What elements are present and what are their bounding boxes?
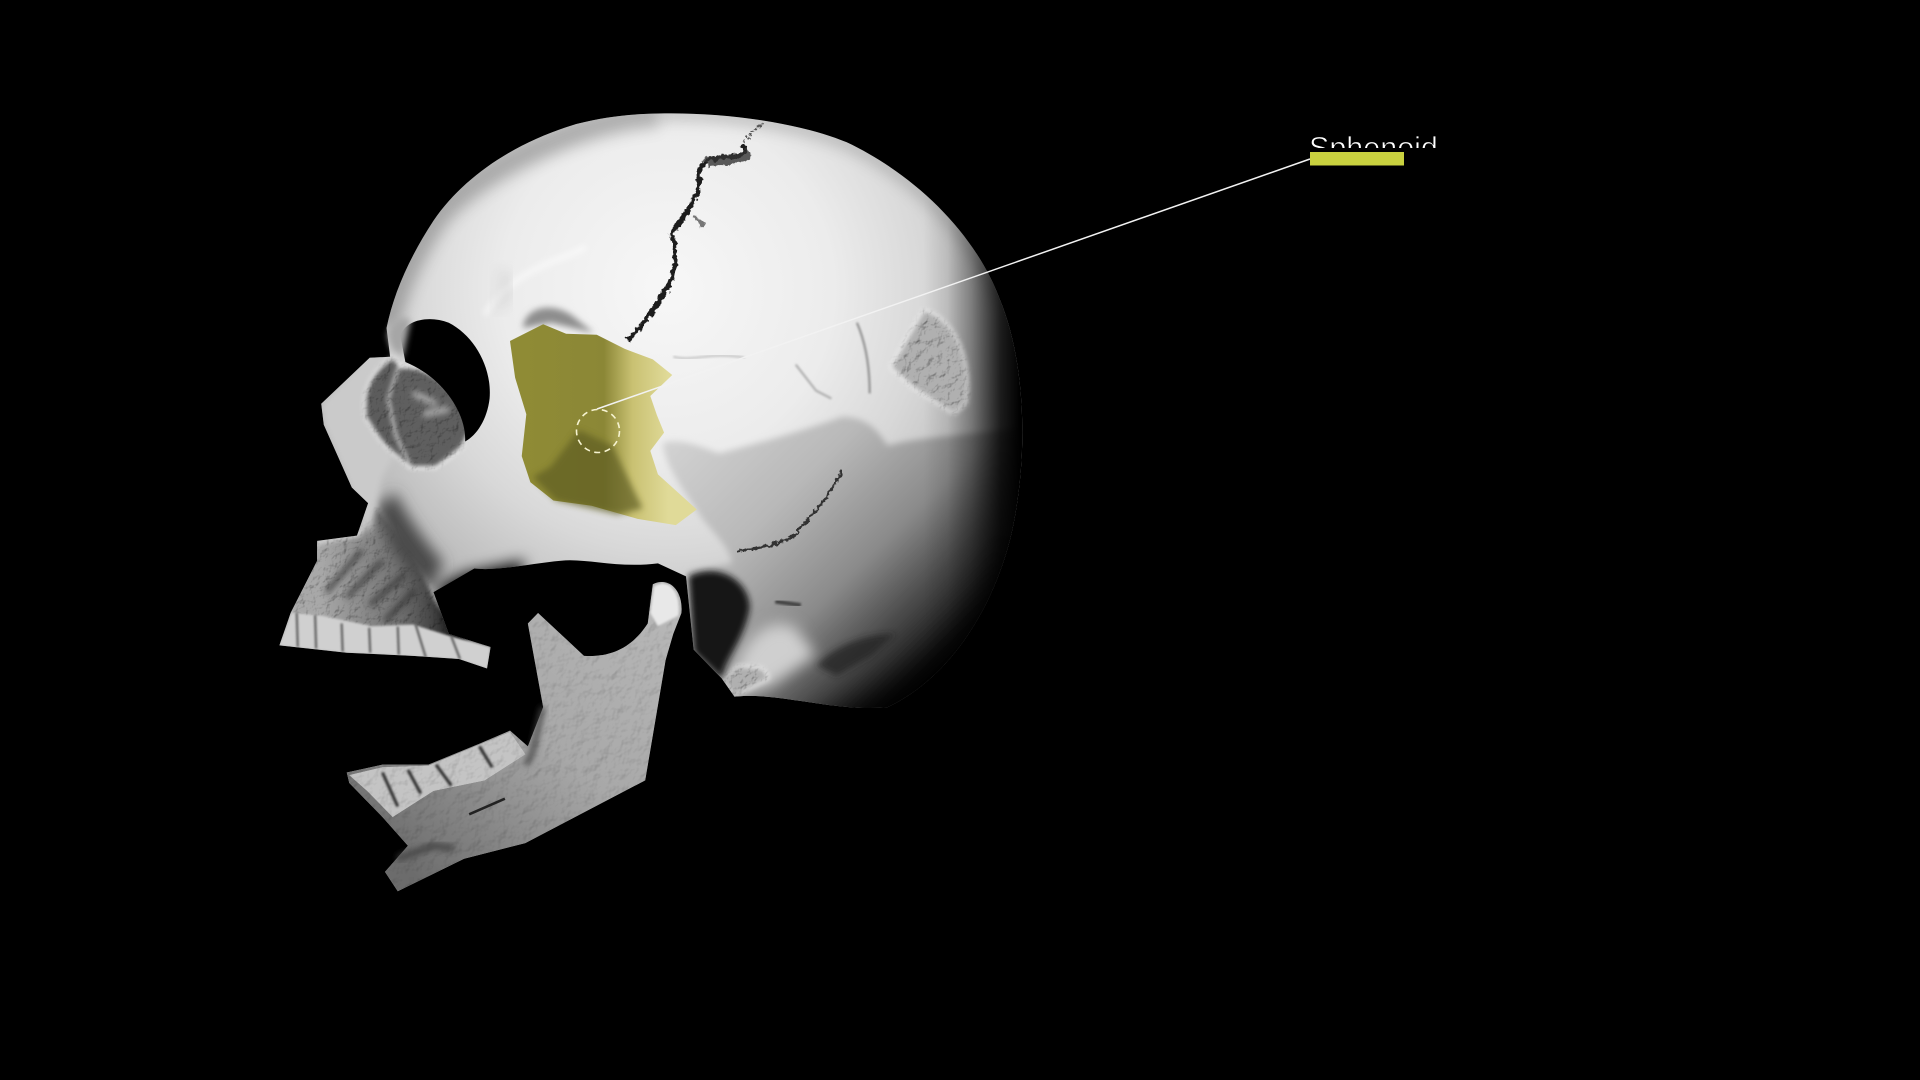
cheek shadow: [375, 493, 444, 592]
coronal suture: [627, 122, 763, 340]
label bar: [1310, 152, 1404, 166]
eye orbit: [365, 318, 490, 468]
skull diagram with sphenoid callout: [280, 113, 1436, 892]
mandible: [347, 582, 682, 891]
maxilla: [286, 503, 474, 656]
leader line: [597, 159, 1310, 409]
nasal bone: [321, 357, 394, 535]
sphenoid interior shading: [533, 430, 643, 515]
under-zygomatic shadow: [689, 571, 750, 678]
pterion shadow: [523, 308, 594, 333]
temporal roughness: [890, 310, 968, 414]
upper teeth: [279, 613, 491, 668]
sphenoid highlight: [510, 324, 697, 525]
skull illustration: [260, 90, 1076, 891]
lower teeth: [349, 732, 525, 817]
condyle highlight: [650, 584, 679, 626]
cranium: [280, 113, 1022, 708]
label: Sphenoid, clipped at the top of the bar: Sphenoid: [1309, 131, 1438, 165]
maxilla root ridges: [326, 550, 416, 621]
black under cheekbone: [439, 561, 525, 650]
target circle: [576, 410, 620, 452]
